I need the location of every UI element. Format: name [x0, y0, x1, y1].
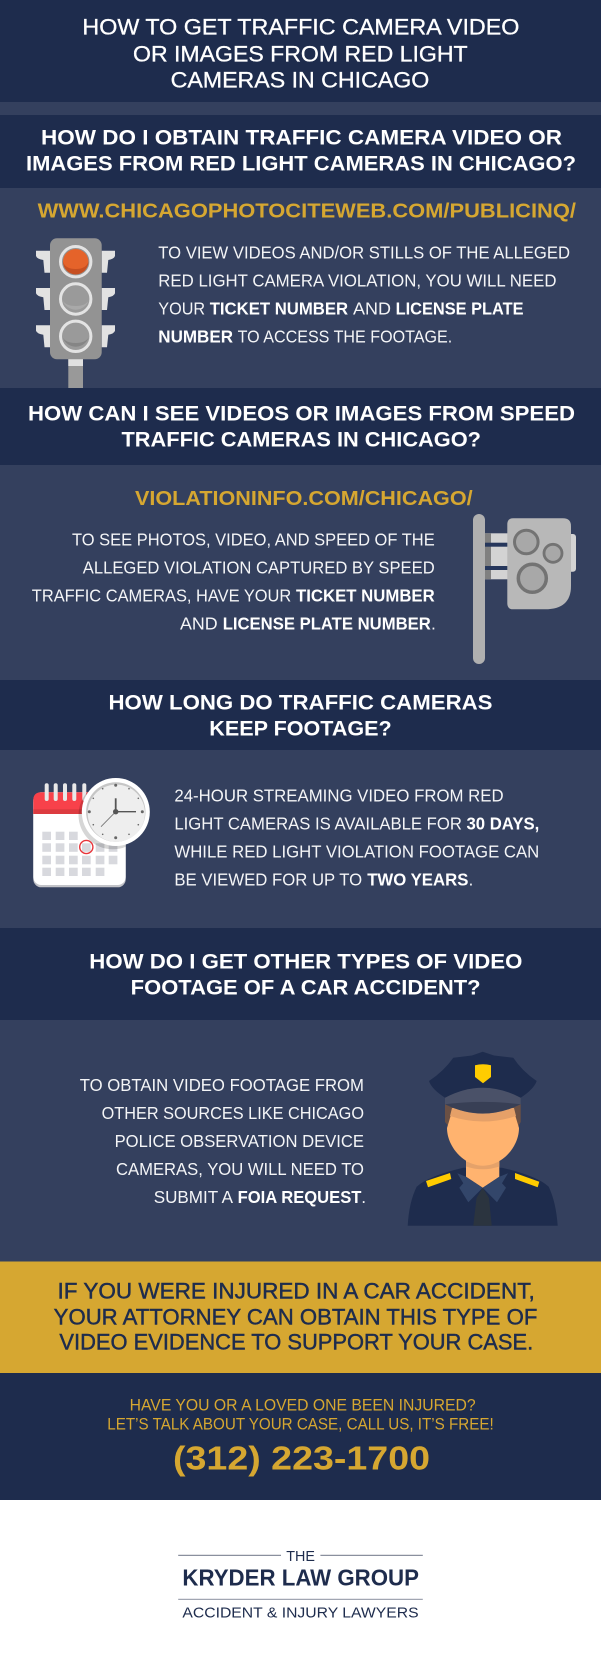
- icon: speed camera: [473, 514, 576, 664]
- icon: police officer: [408, 1052, 558, 1226]
- title text: HOW TO GET TRAFFIC CAMERA VIDEO: [82, 14, 519, 40]
- text block: speed camera instructions: ALLEGED VIOLATION CAPTURED BY SPEED: [83, 557, 435, 577]
- heading: red light cameras: HOW DO I OBTAIN TRAFFIC CAMERA VIDEO OR: [41, 126, 562, 149]
- text block: red light instructions: AND: [353, 298, 391, 318]
- heading: other video footage: HOW DO I GET OTHER TYPES OF VIDEO: [89, 951, 522, 974]
- link: red light portal: WWW.CHICAGOPHOTOCITEWEB.COM/PUBLICINQ/: [38, 201, 576, 223]
- panel: callout: [0, 1262, 601, 1373]
- panel: title: [0, 0, 601, 115]
- phone number: (312) 223-1700: [173, 1439, 430, 1476]
- text block: red light instructions: [158, 242, 570, 346]
- text block: red light instructions: YOUR: [158, 298, 205, 318]
- text block: speed camera instructions: AND: [180, 613, 218, 633]
- text block: retention periods: TWO YEARS: [367, 869, 468, 889]
- text block: red light instructions: RED LIGHT CAMERA VIOLATION, YOU WILL NEED: [158, 270, 557, 290]
- logo: The Kryder Law Group: [178, 1549, 423, 1622]
- panel: other video footage: [0, 928, 601, 1262]
- text block: speed camera instructions: TO SEE PHOTOS, VIDEO, AND SPEED OF THE: [72, 529, 435, 549]
- text block: retention periods: .: [468, 869, 473, 889]
- call to action text: LET’S TALK ABOUT YOUR CASE, CALL US, IT’S FREE!: [107, 1416, 494, 1434]
- text block: red light instructions: TICKET NUMBER: [210, 298, 348, 318]
- logo: The Kryder Law Group: ACCIDENT & INJURY LAWYERS: [182, 1606, 419, 1622]
- icon: traffic light: [36, 238, 115, 388]
- title text: OR IMAGES FROM RED LIGHT: [133, 42, 468, 67]
- text block: red light instructions: TO VIEW VIDEOS AND/OR STILLS OF THE ALLEGED: [158, 242, 570, 262]
- callout text: IF YOU WERE INJURED IN A CAR ACCIDENT,: [58, 1278, 535, 1303]
- text block: retention periods: WHILE RED LIGHT VIOLATION FOOTAGE CAN: [174, 841, 539, 861]
- text block: FOIA request: POLICE OBSERVATION DEVICE: [115, 1131, 364, 1151]
- callout text: VIDEO EVIDENCE TO SUPPORT YOUR CASE.: [59, 1329, 533, 1354]
- text block: FOIA request: CAMERAS, YOU WILL NEED TO: [116, 1159, 364, 1179]
- call to action text: HAVE YOU OR A LOVED ONE BEEN INJURED?: [130, 1397, 476, 1415]
- text block: retention periods: BE VIEWED FOR UP TO: [174, 869, 362, 889]
- text block: FOIA request: .: [361, 1187, 366, 1207]
- text block: speed camera instructions: TRAFFIC CAMERAS, HAVE YOUR: [32, 585, 291, 605]
- call to action text: [107, 1397, 494, 1434]
- panel: speed cameras: [0, 388, 601, 680]
- text block: FOIA request: FOIA REQUEST: [238, 1187, 362, 1207]
- panel: red light cameras: [0, 115, 601, 388]
- text block: retention periods: [174, 785, 539, 889]
- logo: The Kryder Law Group: KRYDER LAW GROUP: [182, 1564, 419, 1590]
- heading: speed cameras: HOW CAN I SEE VIDEOS OR IMAGES FROM SPEED: [28, 403, 575, 426]
- callout text: [54, 1278, 537, 1354]
- heading: speed cameras: [28, 403, 575, 452]
- text block: red light instructions: NUMBER: [158, 326, 233, 346]
- icon: calendar and clock: [33, 778, 150, 887]
- text block: speed camera instructions: LICENSE PLATE NUMBER: [223, 613, 431, 633]
- heading: speed cameras: TRAFFIC CAMERAS IN CHICAGO?: [122, 429, 481, 452]
- heading: footage retention: [108, 692, 492, 741]
- text block: retention periods: LIGHT CAMERAS IS AVAILABLE FOR: [174, 813, 462, 833]
- heading: other video footage: [89, 951, 522, 999]
- text block: FOIA request: OTHER SOURCES LIKE CHICAGO: [102, 1103, 364, 1123]
- text block: retention periods: 24-HOUR STREAMING VIDEO FROM RED: [174, 785, 504, 805]
- title text: [82, 14, 519, 93]
- link: speed camera portal: VIOLATIONINFO.COM/CHICAGO/: [135, 488, 473, 510]
- heading: other video footage: FOOTAGE OF A CAR ACCIDENT?: [131, 976, 481, 999]
- text block: FOIA request: TO OBTAIN VIDEO FOOTAGE FROM: [80, 1075, 364, 1095]
- heading: red light cameras: [26, 126, 576, 175]
- logo: The Kryder Law Group: THE: [286, 1549, 315, 1565]
- heading: footage retention: KEEP FOOTAGE?: [209, 718, 392, 741]
- text block: retention periods: 30 DAYS,: [466, 813, 539, 833]
- heading: red light cameras: IMAGES FROM RED LIGHT CAMERAS IN CHICAGO?: [26, 152, 576, 175]
- panel: footage retention: [0, 680, 601, 928]
- heading: footage retention: HOW LONG DO TRAFFIC CAMERAS: [108, 692, 492, 715]
- callout text: YOUR ATTORNEY CAN OBTAIN THIS TYPE OF: [54, 1304, 537, 1329]
- text block: FOIA request: [80, 1075, 366, 1207]
- title text: CAMERAS IN CHICAGO: [171, 68, 429, 93]
- text block: red light instructions: TO ACCESS THE FOOTAGE.: [238, 326, 452, 346]
- text block: red light instructions: LICENSE PLATE: [396, 298, 524, 318]
- text block: FOIA request: SUBMIT A: [154, 1187, 233, 1207]
- text block: speed camera instructions: TICKET NUMBER: [296, 585, 435, 605]
- text block: speed camera instructions: [32, 529, 436, 633]
- text block: speed camera instructions: .: [431, 613, 436, 633]
- panel: call to action: [0, 1373, 601, 1500]
